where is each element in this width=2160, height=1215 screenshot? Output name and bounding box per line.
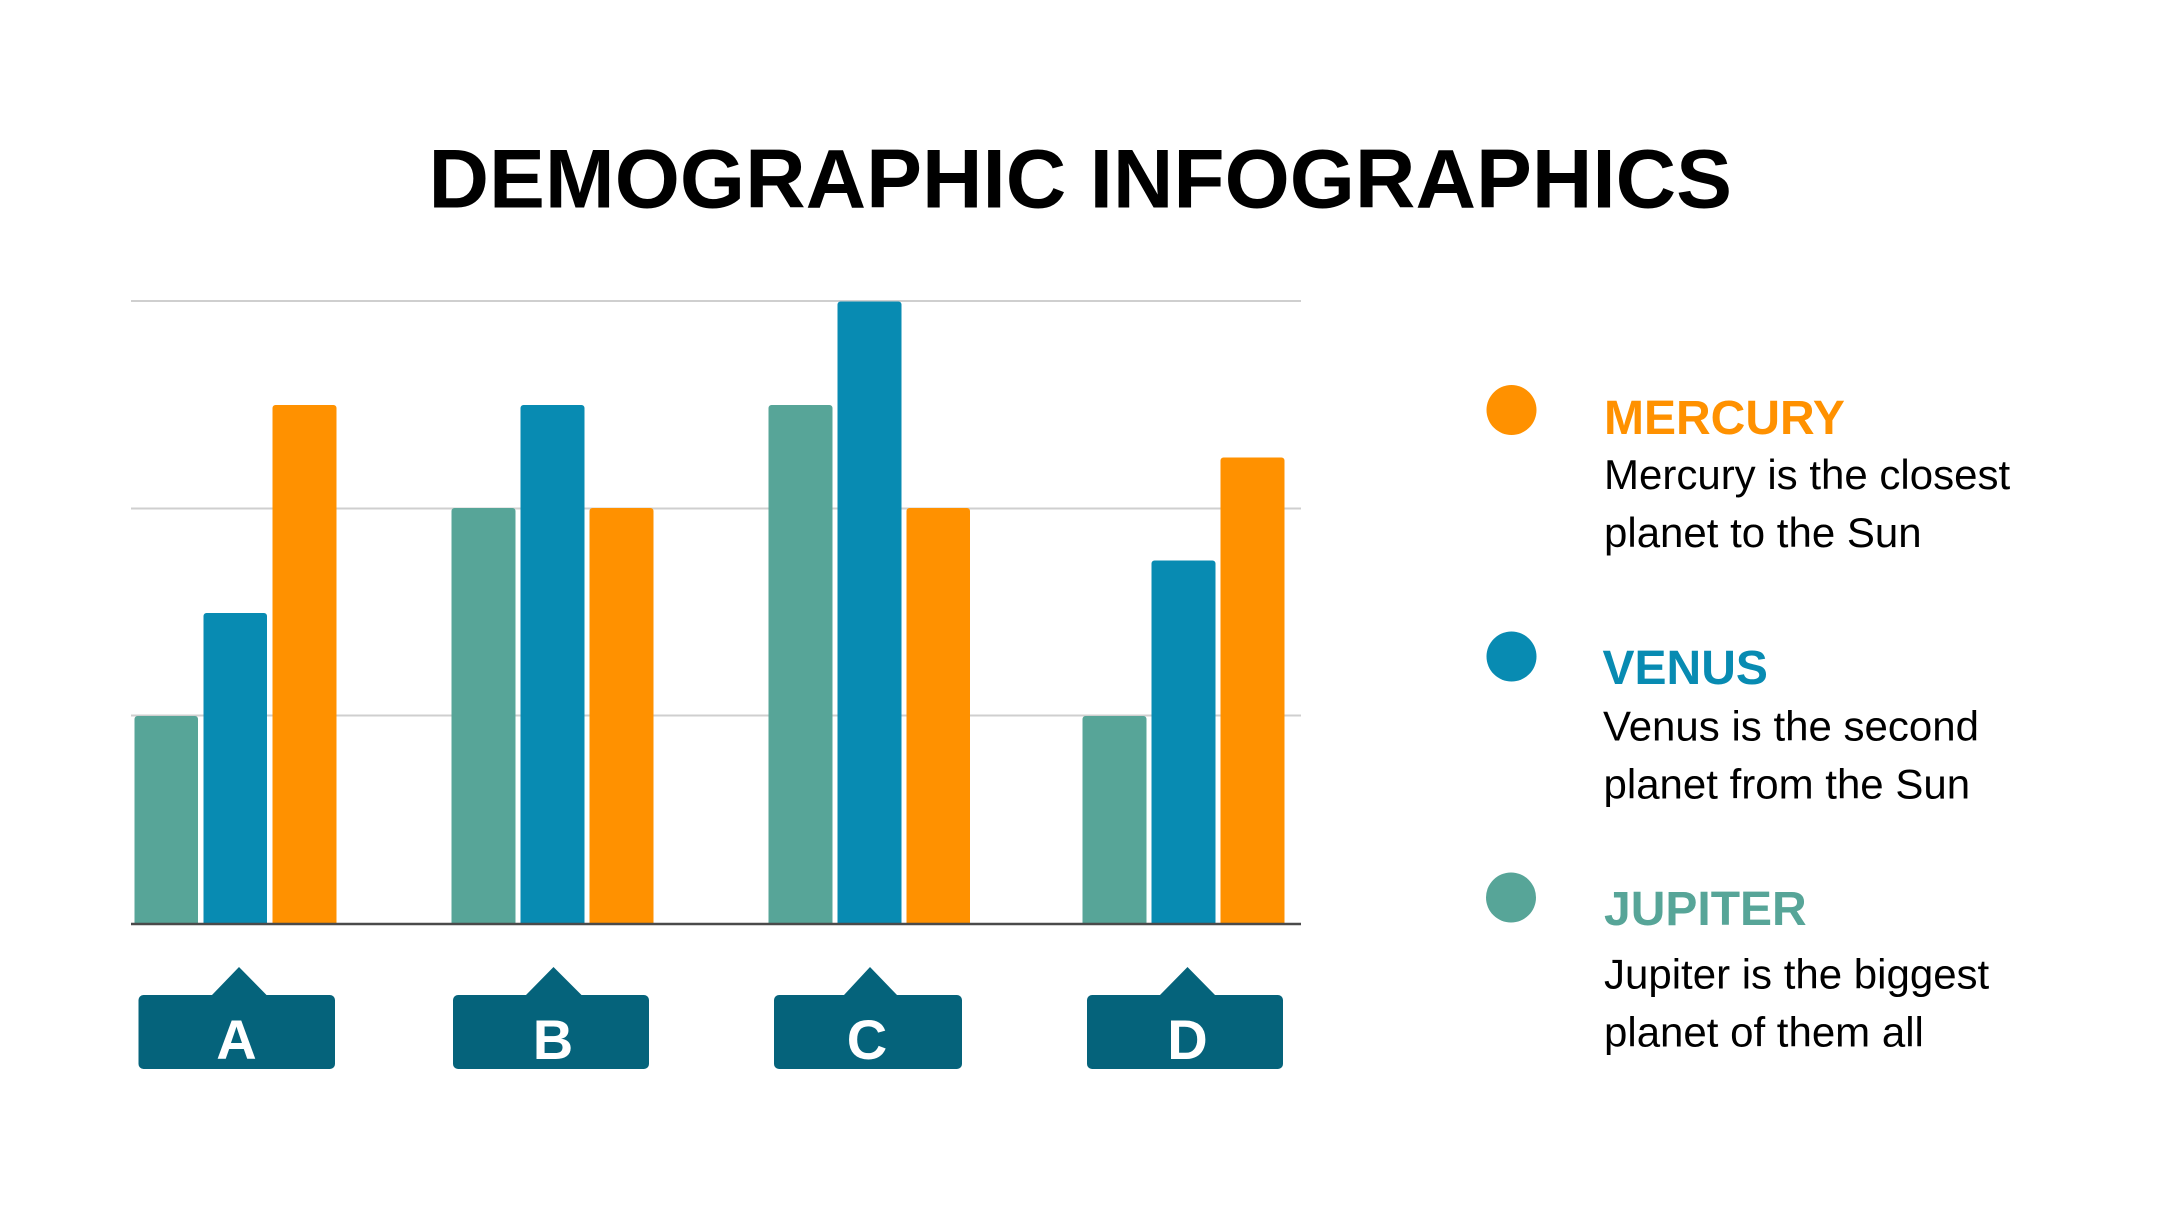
text: Jupiter description: Jupiter is the biggest (1604, 950, 1990, 998)
bar chart (131, 301, 1301, 924)
icon: green dot (1486, 872, 1536, 922)
category label A: A (216, 1008, 257, 1071)
bar group B (452, 405, 654, 924)
icon: orange dot (1486, 385, 1536, 435)
heading: Mercury: MERCURY (1604, 392, 1845, 445)
text: Mercury description: Mercury is the closest (1604, 451, 2010, 498)
heading: Jupiter: JUPITER (1604, 883, 1807, 936)
text: Venus description: planet from the Sun (1604, 760, 1970, 808)
legend: Mercury (1486, 385, 2010, 556)
text: Venus description: Venus is the second (1603, 702, 1979, 750)
category label A (138, 967, 335, 1071)
category label B: B (533, 1008, 573, 1071)
bar group A (134, 405, 336, 924)
category label D (1087, 967, 1283, 1071)
legend: Venus (1486, 632, 1979, 808)
category label B (453, 967, 649, 1071)
category label D: D (1167, 1008, 1208, 1071)
category label C (774, 967, 962, 1071)
legend: Jupiter (1486, 872, 1990, 1056)
heading: Venus: VENUS (1602, 642, 1768, 695)
category label C: C (847, 1008, 887, 1071)
bar group C (768, 302, 970, 924)
title: DEMOGRAPHIC INFOGRAPHICS (428, 132, 1732, 226)
icon: blue dot (1486, 632, 1536, 682)
text: Mercury description: planet to the Sun (1604, 509, 1922, 556)
text: Jupiter description: planet of them all (1604, 1008, 1924, 1056)
bar group D (1082, 458, 1284, 924)
